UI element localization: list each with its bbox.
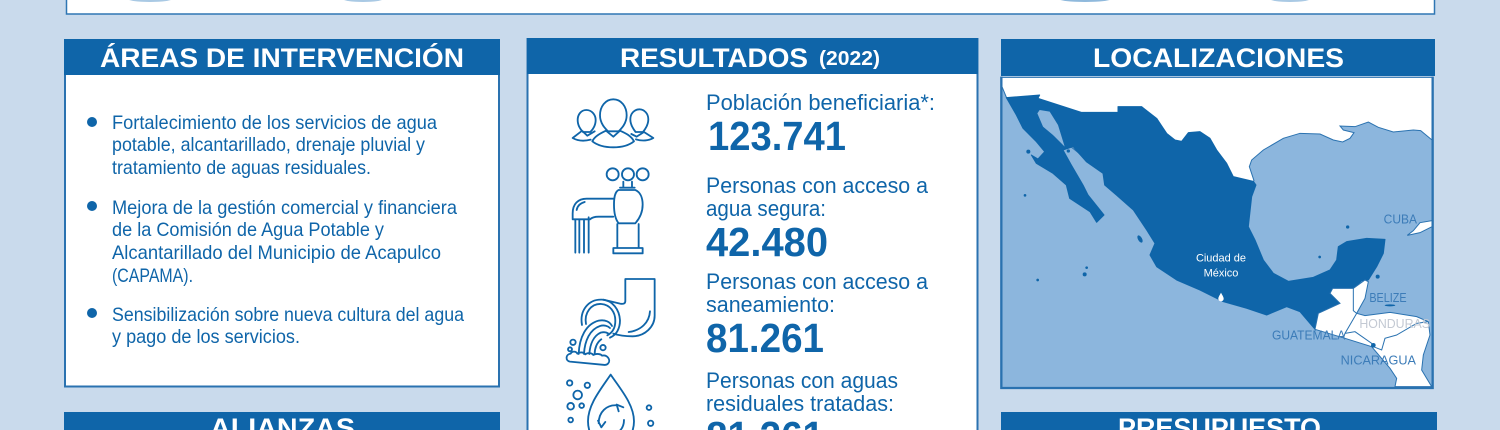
- country labels: GUATEMALA: [1272, 327, 1345, 342]
- panel: resultados: [527, 38, 978, 430]
- stat: agua segura: Personas con acceso a: [706, 173, 928, 198]
- icon: drain pipe: [567, 279, 655, 365]
- map: México y Centroamérica: [1001, 77, 1433, 388]
- bullet list: áreas de intervención: tratamiento de aguas residuales.: [112, 157, 371, 179]
- bullet list: áreas de intervención: Alcantarillado del Municipio de Acapulco: [112, 242, 441, 264]
- panel: alianzas: [64, 412, 500, 430]
- borders: Central America: [1343, 288, 1428, 350]
- map label: Ciudad de México: Ciudad de: [1196, 253, 1246, 265]
- bullet list: áreas de intervención: Fortalecimiento de los servicios de agua: [112, 112, 437, 134]
- country labels: NICARAGUA: [1341, 353, 1416, 368]
- stat: población beneficiaria: 123.741: [708, 113, 846, 159]
- country labels: HONDURAS: [1359, 316, 1430, 331]
- stat: saneamiento: [706, 269, 928, 361]
- panel: presupuesto: [1001, 412, 1437, 430]
- land: Central America: [1315, 280, 1432, 387]
- bullet list: áreas de intervención: Mejora de la gestión comercial y financiera: [112, 197, 457, 219]
- stat: agua segura: agua segura:: [706, 196, 826, 221]
- icon: recycled water drop: [567, 375, 653, 430]
- bullet list: áreas de intervención: de la Comisión de Agua Potable y: [112, 219, 384, 241]
- marker: Acapulco: [1218, 293, 1224, 301]
- land: Mexico: [1006, 95, 1385, 330]
- water: upper Gulf of California: [1037, 110, 1065, 147]
- icon: people: [573, 99, 653, 147]
- icon: water tap: [573, 168, 649, 253]
- stat: aguas residuales tratadas: Personas con aguas: [706, 368, 898, 393]
- country labels: CUBA: [1384, 211, 1417, 226]
- map label: Ciudad de México: México: [1204, 267, 1238, 279]
- land: Cuba: [1407, 221, 1432, 235]
- panel: localizaciones: [1001, 39, 1435, 388]
- stat: saneamiento: saneamiento:: [706, 292, 835, 317]
- country labels: BELIZE: [1369, 290, 1407, 305]
- heading: áreas de intervención: ÁREAS DE INTERVENCIÓN: [100, 42, 464, 73]
- heading: resultados: RESULTADOS: [620, 43, 808, 73]
- stat: población beneficiaria: [706, 90, 935, 159]
- stat: aguas residuales tratadas: residuales tratadas:: [706, 391, 894, 416]
- stat: aguas residuales tratadas: [706, 368, 898, 430]
- heading: resultados: (2022): [819, 48, 880, 70]
- panel: áreas de intervención: [64, 39, 500, 386]
- stat: saneamiento: 81.261: [706, 315, 824, 361]
- map label: Ciudad de México: [1196, 253, 1246, 279]
- stat: población beneficiaria: Población beneficiaria*:: [706, 90, 935, 115]
- bullet list: áreas de intervención: (CAPAMA).: [112, 265, 193, 287]
- islands: [1024, 149, 1395, 348]
- heading: localizaciones: LOCALIZACIONES: [1093, 43, 1344, 73]
- bullet list: áreas de intervención: potable, alcantarillado, drenaje pluvial y: [112, 134, 425, 156]
- bullet list: áreas de intervención: y pago de los servicios.: [112, 326, 300, 348]
- stat: agua segura: 42.480: [706, 219, 828, 265]
- country labels: [1272, 211, 1430, 368]
- top panel: [66, 0, 1434, 14]
- bullet list: áreas de intervención: [87, 112, 464, 348]
- stat: saneamiento: Personas con acceso a: [706, 269, 928, 294]
- stat: agua segura: [706, 173, 928, 265]
- land: United States: [1002, 77, 1432, 203]
- bullet list: áreas de intervención: Sensibilización sobre nueva cultura del agua: [112, 304, 464, 326]
